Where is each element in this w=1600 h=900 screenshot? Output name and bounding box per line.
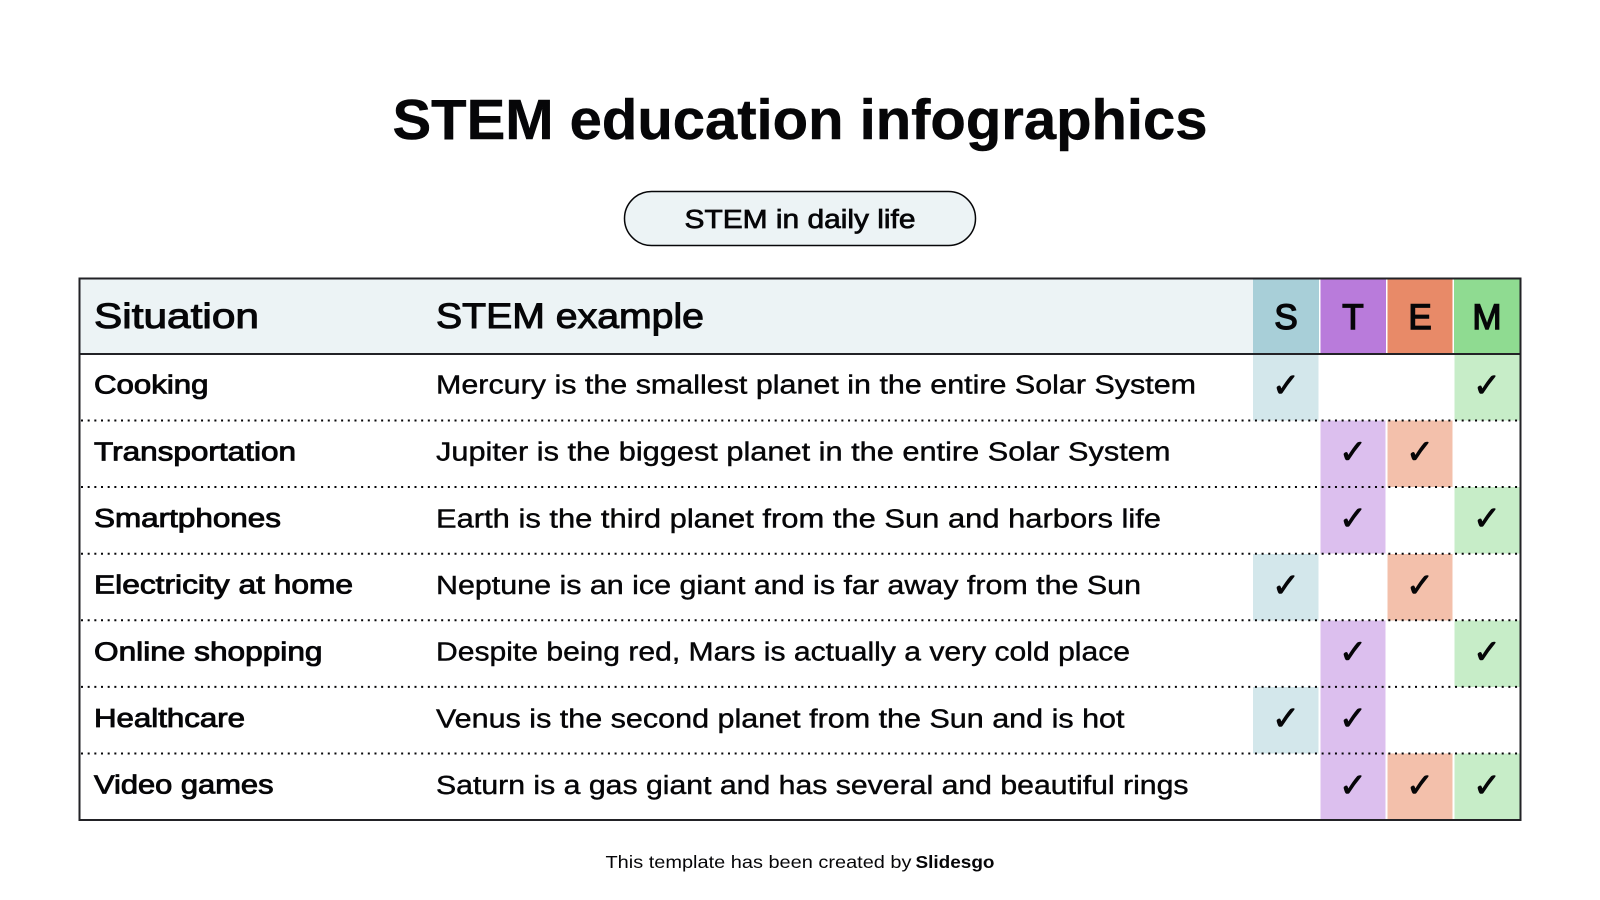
row: Transportation: ✓ (1406, 432, 1434, 471)
row: Cooking: ✓ (1272, 366, 1300, 404)
row: Video games: ✓ (1473, 765, 1501, 804)
row: Video games: ✓ (1339, 765, 1367, 804)
row: Smartphones: ✓ (1339, 498, 1367, 538)
row: Video games: Saturn is a gas giant and has several and beautiful rings (436, 772, 1188, 800)
row: Electricity at home: Electricity at home (94, 572, 353, 600)
row: Online shopping: ✓ (1473, 632, 1501, 671)
row: Healthcare (94, 698, 1367, 738)
row: Video games: Video games (94, 772, 274, 800)
row: Electricity at home (94, 565, 1434, 604)
row: Smartphones: Earth is the third planet from the Sun and harbors life (436, 505, 1161, 533)
table header row: M (1472, 298, 1502, 337)
panel: STEM table (79, 278, 1521, 820)
row: Smartphones (94, 498, 1501, 538)
row: Smartphones: Smartphones (94, 505, 281, 533)
cell shading: T column (1320, 420, 1386, 820)
row: Healthcare: ✓ (1339, 698, 1367, 738)
row: Electricity at home: ✓ (1272, 565, 1300, 604)
table header row: Situation (94, 297, 259, 336)
row: Electricity at home: Neptune is an ice giant and is far away from the Sun (436, 572, 1141, 600)
footer credit (606, 852, 994, 872)
row: Healthcare: ✓ (1272, 698, 1300, 738)
table header row: E (1408, 298, 1432, 337)
cell shading: S column (1253, 354, 1318, 754)
footer credit: This template has been created by (606, 852, 912, 872)
table header row: T (1342, 298, 1364, 337)
row: Transportation (94, 432, 1434, 471)
row: Cooking: Mercury is the smallest planet in the entire Solar System (436, 372, 1196, 400)
row: Online shopping: ✓ (1339, 632, 1367, 671)
row: Smartphones: ✓ (1473, 498, 1501, 538)
subtitle pill: STEM in daily life (684, 206, 916, 234)
subtitle pill (624, 192, 976, 246)
row: Cooking: Cooking (94, 372, 208, 400)
row: Online shopping: Online shopping (94, 638, 322, 666)
cell shading: M column (1454, 354, 1520, 820)
row: Cooking (94, 366, 1501, 404)
row: Transportation: Transportation (94, 438, 296, 466)
row: Transportation: Jupiter is the biggest planet in the entire Solar System (436, 438, 1170, 466)
row: Healthcare: Healthcare (94, 705, 245, 733)
row: Transportation: ✓ (1339, 432, 1367, 471)
table header row: STEM example (436, 297, 704, 336)
row: Video games (94, 765, 1501, 804)
row: Video games: ✓ (1406, 765, 1434, 804)
table header row (79, 278, 1521, 354)
row: Cooking: ✓ (1473, 366, 1501, 404)
cell shading: E column (1388, 420, 1452, 820)
footer credit: Slidesgo (916, 852, 994, 872)
row: Online shopping: Despite being red, Mars is actually a very cold place (436, 638, 1130, 666)
row: Electricity at home: ✓ (1406, 565, 1434, 604)
row: Online shopping (94, 632, 1501, 671)
row: Healthcare: Venus is the second planet from the Sun and is hot (436, 705, 1124, 733)
table header row: S (1274, 298, 1298, 337)
title: STEM education infographics (392, 88, 1208, 152)
